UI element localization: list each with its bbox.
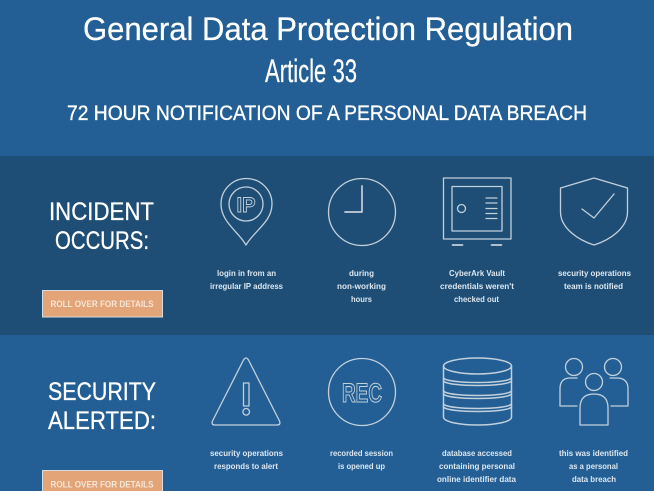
heading: incident occurs: OCCURS: bbox=[55, 227, 149, 255]
icon: warning triangle bbox=[212, 358, 280, 425]
caption: database accessed: online identifier data bbox=[437, 474, 516, 484]
caption: personal data breach: data breach bbox=[572, 474, 616, 484]
caption: database accessed: containing personal bbox=[439, 461, 515, 471]
button: roll over for details bbox=[42, 470, 162, 491]
caption: login bbox=[210, 268, 283, 291]
caption: non-working hours: hours bbox=[351, 294, 372, 304]
caption: database accessed bbox=[437, 448, 516, 484]
panel: security alerted bbox=[42, 358, 628, 491]
caption: non-working hours: during bbox=[349, 268, 374, 278]
caption: vault: credentials weren't bbox=[440, 281, 514, 291]
button: roll over for details bbox=[42, 290, 162, 317]
title bbox=[83, 11, 573, 89]
icon: recording bbox=[328, 358, 396, 426]
caption: recorded session: recorded session bbox=[330, 448, 393, 458]
icon: clock bbox=[328, 178, 396, 246]
caption: responds to alert: responds to alert bbox=[214, 461, 278, 471]
title: General Data Protection Regulation bbox=[83, 11, 573, 47]
caption: vault: CyberArk Vault bbox=[449, 268, 505, 278]
subtitle: 72 HOUR NOTIFICATION OF A PERSONAL DATA BREACH bbox=[67, 102, 587, 125]
icon: IP location pin: IP bbox=[236, 194, 256, 217]
caption: recorded session bbox=[330, 448, 393, 471]
heading: incident occurs: INCIDENT bbox=[49, 198, 154, 226]
button: roll over for details: ROLL OVER FOR DETAILS bbox=[50, 299, 154, 309]
title: Article 33 bbox=[265, 53, 357, 89]
caption: non-working hours: non-working bbox=[337, 281, 386, 291]
caption: responds to alert: security operations bbox=[210, 448, 283, 458]
caption: recorded session: is opened up bbox=[338, 461, 385, 471]
caption: responds to alert bbox=[210, 448, 283, 471]
icon: vault bbox=[444, 178, 511, 245]
caption: vault bbox=[440, 268, 514, 304]
panel: incident occurs bbox=[0, 156, 654, 335]
caption: personal data breach: as a personal bbox=[569, 461, 618, 471]
caption: database accessed: database accessed bbox=[442, 448, 512, 458]
heading: security alerted: SECURITY bbox=[48, 378, 156, 406]
icon: IP location pin bbox=[221, 178, 272, 245]
icon: database bbox=[444, 358, 512, 425]
caption: login: irregular IP address bbox=[210, 281, 283, 291]
heading: security alerted bbox=[48, 378, 156, 435]
caption: personal data breach: this was identified bbox=[559, 448, 628, 458]
caption: personal data breach bbox=[559, 448, 628, 484]
icon: people bbox=[560, 358, 628, 425]
caption: team notified: team is notified bbox=[564, 281, 623, 291]
caption: non-working hours bbox=[337, 268, 386, 304]
icon: shield with check bbox=[560, 178, 628, 245]
caption: vault: checked out bbox=[454, 294, 499, 304]
caption: team notified bbox=[558, 268, 631, 291]
button: roll over for details: ROLL OVER FOR DETAILS bbox=[50, 480, 154, 490]
heading: security alerted: ALERTED: bbox=[48, 407, 156, 435]
icon: recording: REC bbox=[342, 378, 382, 408]
caption: login: login in from an bbox=[217, 268, 276, 278]
heading: incident occurs bbox=[49, 198, 154, 255]
caption: team notified: security operations bbox=[558, 268, 631, 278]
